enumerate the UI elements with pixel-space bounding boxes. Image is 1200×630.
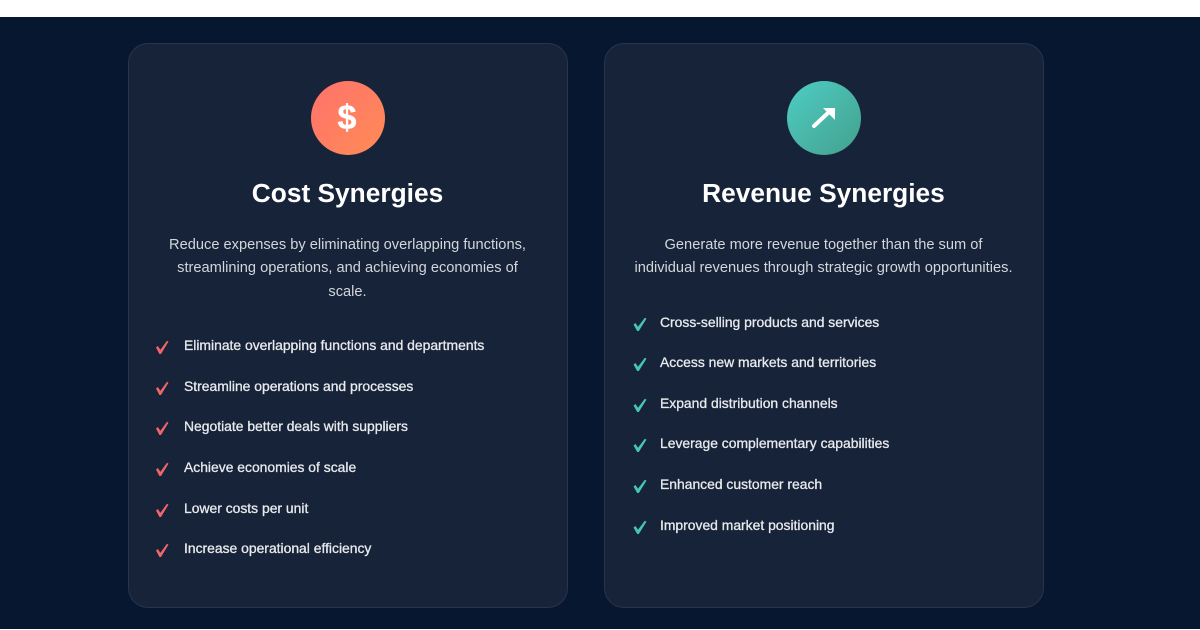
list item: customer reach: Enhanced customer reach [660,476,822,492]
text block: cost description: Reduce expenses by eliminating overlapping functions, [169,237,526,253]
list item: market positioning: Improved market positioning [660,517,834,533]
icon: dollar sign [311,81,385,155]
text block: revenue description [634,237,1013,276]
heading: revenue synergies: Revenue Synergies [702,178,945,208]
text block: cost description [169,237,526,300]
text block: cost description: scale. [328,284,367,300]
list item: lower costs: Lower costs per unit [184,500,308,516]
list item: streamline: Streamline operations and processes [184,378,413,394]
list item: economies of scale: Achieve economies of scale [184,459,356,475]
icon: dollar sign: $ [338,99,356,137]
list item: eliminate: Eliminate overlapping functions and departments [184,337,484,353]
list: cost benefits [156,337,484,557]
heading: cost synergies: Cost Synergies [252,178,443,208]
text block: revenue description: individual revenues through strategic growth opportunities. [634,260,1013,276]
list item: capabilities: Leverage complementary capabilities [660,435,889,451]
text block: cost description: streamlining operations, and achieving economies of [177,260,518,276]
list item: cross-selling: Cross-selling products and services [660,314,879,330]
list item: new markets: Access new markets and territories [660,354,876,370]
list item: negotiate: Negotiate better deals with suppliers [184,418,408,434]
list item: distribution: Expand distribution channels [660,395,838,411]
list: revenue benefits [634,314,889,534]
icon: upward arrow [787,81,861,155]
panel: cost synergies [128,43,568,608]
list item: efficiency: Increase operational efficiency [184,540,371,556]
panel: revenue synergies [604,43,1044,608]
text block: revenue description: Generate more revenue together than the sum of [665,237,982,253]
